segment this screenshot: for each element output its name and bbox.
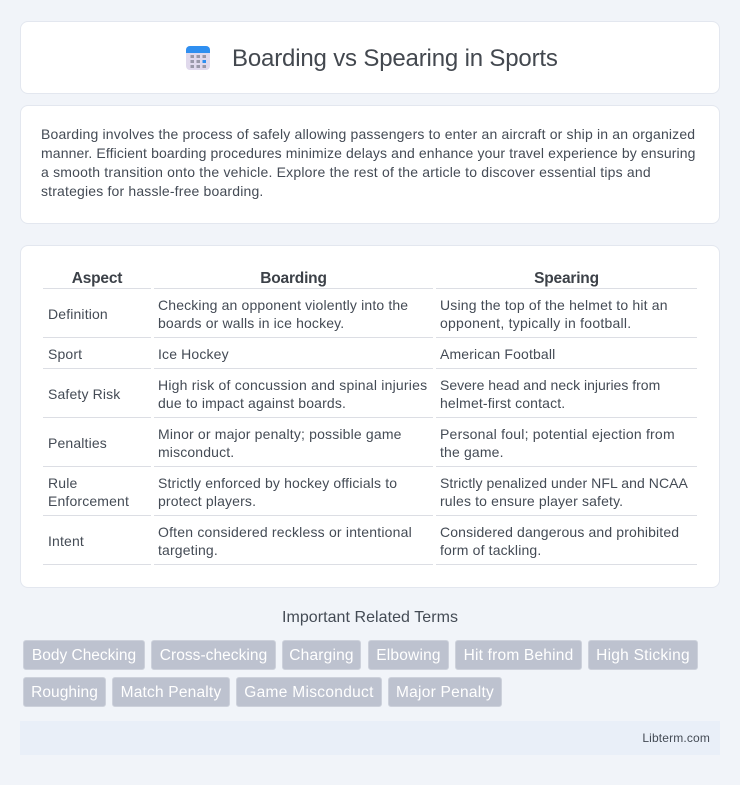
tag: Charging [289, 647, 354, 664]
row: intent [48, 524, 679, 558]
row: rule enforcement: Rule [48, 475, 77, 491]
row: rule enforcement: Strictly penalized under NFL and NCAA [440, 475, 688, 491]
row: safety risk: Safety Risk [48, 386, 120, 402]
row: intent: form of tackling. [440, 542, 541, 558]
row: rule enforcement: protect players. [158, 493, 256, 509]
tag [23, 640, 145, 670]
row: safety risk [48, 377, 660, 411]
row: definition [48, 297, 668, 331]
row: definition: opponent, typically in football. [440, 315, 631, 331]
tag: Roughing [31, 684, 98, 701]
row: sport [48, 346, 555, 362]
related terms heading: Important Related Terms [282, 609, 458, 626]
tag [236, 677, 382, 707]
row: definition: boards or walls in ice hockey. [158, 315, 344, 331]
intro paragraph: strategies for hassle-free boarding. [41, 183, 263, 199]
tag [368, 640, 449, 670]
footer source label: Libterm.com [642, 731, 710, 745]
row: sport: Ice Hockey [158, 346, 229, 362]
footer bar [20, 721, 720, 755]
intro paragraph: Boarding involves the process of safely allowing passengers to enter an aircraft or ship in an organized [41, 126, 695, 142]
row: definition: Checking an opponent violently into the [158, 297, 408, 313]
row: safety risk: due to impact against boards. [158, 395, 346, 411]
row: intent: targeting. [158, 542, 218, 558]
tag [588, 640, 698, 670]
row: penalties: Penalties [48, 435, 107, 451]
related term tags [23, 640, 698, 707]
header panel [20, 21, 720, 94]
row: rule enforcement: rules to ensure player safety. [440, 493, 623, 509]
row: intent: Intent [48, 533, 84, 549]
row: penalties: the game. [440, 444, 504, 460]
table header row: Boarding [260, 270, 327, 287]
row: intent: Often considered reckless or intentional [158, 524, 412, 540]
tag: High Sticking [596, 647, 690, 664]
row: safety risk: Severe head and neck injuries from [440, 377, 660, 393]
title: Boarding vs Spearing in Sports [232, 45, 558, 72]
row: definition: Definition [48, 306, 108, 322]
table header row: Spearing [534, 270, 599, 287]
comparison table panel [20, 245, 720, 588]
tag [23, 677, 106, 707]
table header row [72, 270, 599, 287]
row: penalties: Minor or major penalty; possible game [158, 426, 402, 442]
intro paragraph: manner. Efficient boarding procedures minimize delays and enhance your travel experience by ensuring [41, 145, 696, 161]
tag [388, 677, 502, 707]
intro paragraph [41, 126, 696, 199]
row: rule enforcement [48, 475, 688, 509]
tag: Cross-checking [160, 647, 267, 664]
row: safety risk: High risk of concussion and spinal injuries [158, 377, 427, 393]
tag: Major Penalty [396, 684, 494, 701]
row: sport: American Football [440, 346, 555, 362]
tag: Match Penalty [121, 684, 221, 701]
row: rule enforcement: Enforcement [48, 493, 129, 509]
tag [112, 677, 230, 707]
tag [455, 640, 582, 670]
table header row: Aspect [72, 270, 122, 287]
tag [282, 640, 361, 670]
row: safety risk: helmet-first contact. [440, 395, 565, 411]
tag: Game Misconduct [244, 684, 374, 701]
tag [151, 640, 276, 670]
row: penalties [48, 426, 675, 460]
row: sport: Sport [48, 346, 82, 362]
row: definition: Using the top of the helmet to hit an [440, 297, 668, 313]
intro paragraph: a smooth transition onto the vehicle. Explore the rest of the article to discover essential tips and [41, 164, 651, 180]
row: rule enforcement: Strictly enforced by hockey officials to [158, 475, 397, 491]
tag: Body Checking [32, 647, 136, 664]
tag: Elbowing [376, 647, 441, 664]
row: penalties: misconduct. [158, 444, 234, 460]
row: intent: Considered dangerous and prohibited [440, 524, 679, 540]
comparison table [43, 270, 697, 565]
icon: calendar [186, 46, 210, 70]
row: penalties: Personal foul; potential ejection from [440, 426, 675, 442]
intro text panel [20, 105, 720, 224]
tag: Hit from Behind [464, 647, 573, 664]
